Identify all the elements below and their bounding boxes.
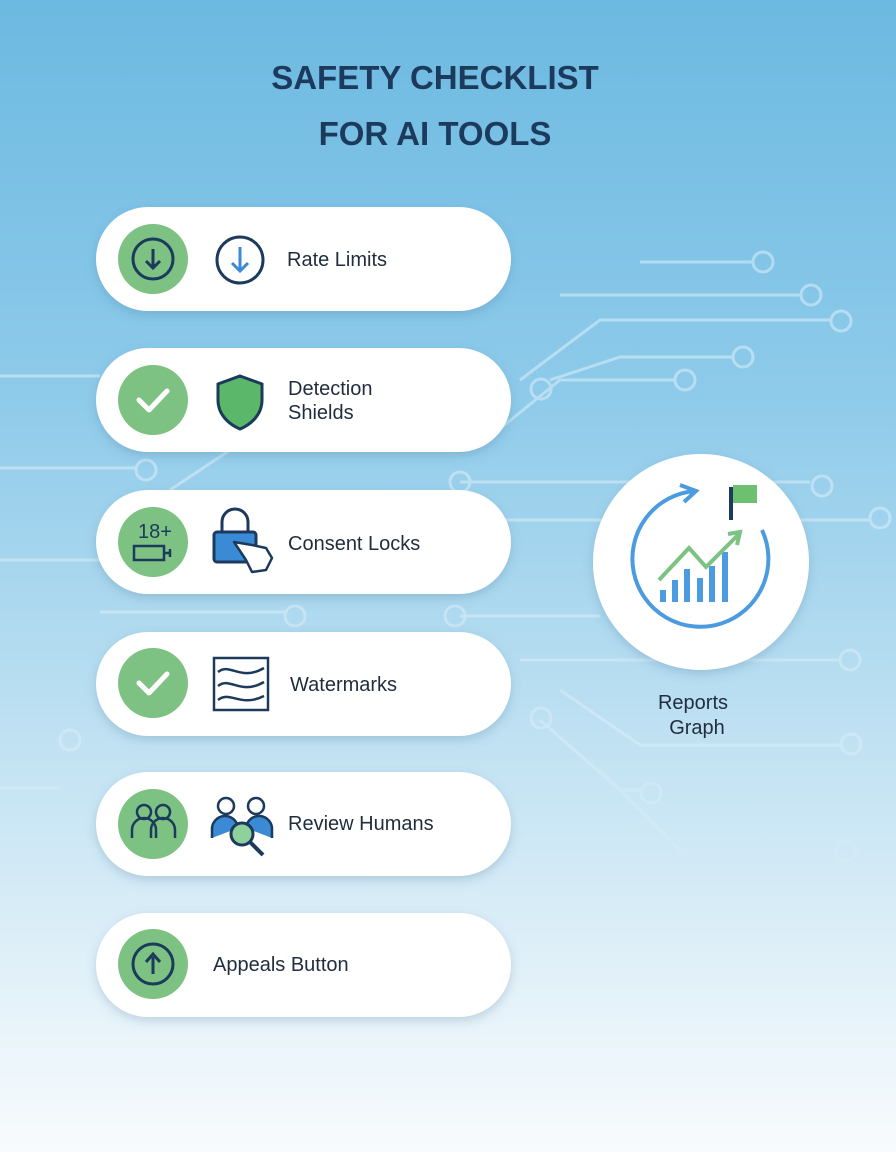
item: detection shields: Shields xyxy=(288,402,354,424)
reports graph: Reports xyxy=(658,692,728,714)
item: consent locks xyxy=(96,490,511,594)
icon: watermark xyxy=(214,658,268,710)
icon: 18+ xyxy=(118,507,188,577)
item: review humans xyxy=(96,772,511,876)
reports graph xyxy=(593,454,809,739)
icon: arrow down circle xyxy=(217,237,263,283)
title xyxy=(271,59,599,152)
icon: green check xyxy=(118,648,188,718)
item: rate limits xyxy=(96,207,511,311)
title: FOR AI TOOLS xyxy=(319,115,551,152)
icon: people xyxy=(118,789,188,859)
icon: green check xyxy=(118,365,188,435)
item: appeals button xyxy=(96,913,511,1017)
icon: 18+: 18+ xyxy=(138,521,172,543)
item: detection shields xyxy=(96,348,511,452)
item: appeals button: Appeals Button xyxy=(213,954,349,976)
reports graph: Graph xyxy=(669,717,725,739)
icon: shield xyxy=(218,376,262,429)
icon: lock with hand xyxy=(214,509,272,572)
item: watermarks xyxy=(96,632,511,736)
item: detection shields: Detection xyxy=(288,378,372,400)
icon: chart xyxy=(632,485,768,627)
item: rate limits: Rate Limits xyxy=(287,249,387,271)
icon: up arrow xyxy=(118,929,188,999)
icon: people with magnifier xyxy=(212,798,272,855)
title: SAFETY CHECKLIST xyxy=(271,59,599,96)
item: consent locks: Consent Locks xyxy=(288,533,420,555)
item: review humans: Review Humans xyxy=(288,813,434,835)
icon: green download xyxy=(118,224,188,294)
item: watermarks: Watermarks xyxy=(290,674,397,696)
